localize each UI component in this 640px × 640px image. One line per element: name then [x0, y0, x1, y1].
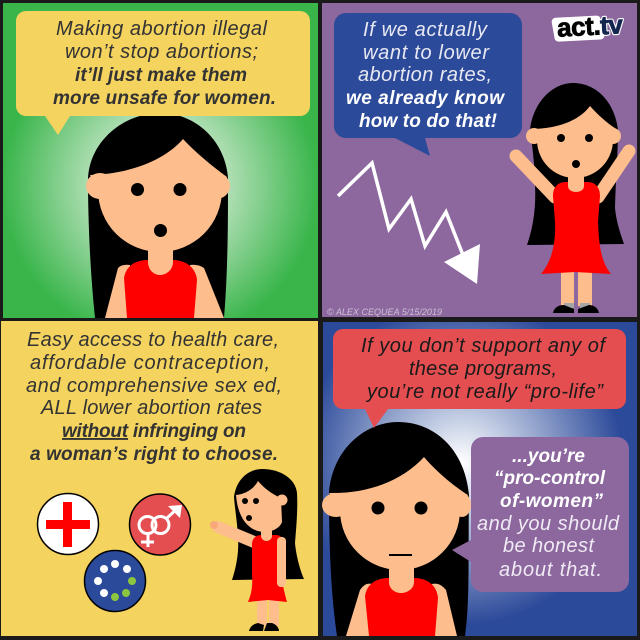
speech bubble: red: If you don’t support any of [361, 335, 607, 357]
text block: programs: a woman’s right to choose. [30, 444, 278, 465]
logo: act.tv: act.tv [556, 9, 624, 43]
text block: programs: ALL lower abortion rates [40, 397, 262, 419]
speech bubble: blue: want to lower [363, 42, 490, 64]
speech bubble: yellow: won’t stop abortions; [65, 41, 258, 63]
icon: gender symbols [130, 494, 190, 555]
character: girl close-up, surprised [86, 113, 230, 318]
text block: programs: without infringing on [62, 421, 246, 442]
copyright: © ALEX CEQUEA 5/15/2019 [327, 307, 442, 317]
panel: blue bottom right [322, 322, 637, 636]
speech bubble: yellow: it’ll just make them [75, 65, 247, 86]
speech bubble: purple: “pro-control [494, 468, 606, 489]
speech bubble: purple: be honest [503, 535, 595, 557]
logo: act.tv: act.tv [556, 9, 624, 43]
speech bubble: yellow [16, 11, 310, 135]
text block: programs [26, 329, 282, 465]
speech bubble: purple [452, 437, 629, 592]
panel: green top left [3, 3, 318, 318]
speech bubble: red [333, 329, 626, 428]
speech bubble: red: you’re not really “pro-life” [365, 381, 604, 403]
speech bubble: blue [334, 13, 522, 156]
speech bubble: blue: abortion rates, [358, 64, 492, 86]
text block: programs: and comprehensive sex ed, [26, 375, 282, 397]
speech bubble: purple: about that. [499, 559, 602, 581]
character: girl pointing [210, 469, 304, 631]
icon: contraception pill pack [84, 550, 146, 612]
character: girl close-up, neutral [322, 422, 471, 636]
speech bubble: blue: how to do that! [359, 111, 497, 132]
speech bubble: blue: If we actually [363, 19, 488, 41]
icon: health care cross [38, 494, 98, 554]
speech bubble: purple: of-women” [500, 491, 604, 512]
character: girl with raised arms [516, 83, 629, 313]
speech bubble: red: these programs, [409, 358, 557, 380]
panel: yellow bottom left [1, 321, 318, 636]
arrow: falling rate [338, 163, 480, 284]
speech bubble: yellow: Making abortion illegal [56, 18, 268, 40]
speech bubble: yellow: more unsafe for women. [53, 88, 276, 109]
text block: programs: Easy access to health care, [27, 329, 279, 351]
speech bubble: blue: we already know [346, 88, 505, 109]
speech bubble: purple: ...you’re [512, 446, 585, 467]
speech bubble: purple: and you should [477, 513, 620, 535]
text block: programs: affordable contraception, [30, 352, 270, 374]
panel: purple top right [322, 3, 637, 317]
